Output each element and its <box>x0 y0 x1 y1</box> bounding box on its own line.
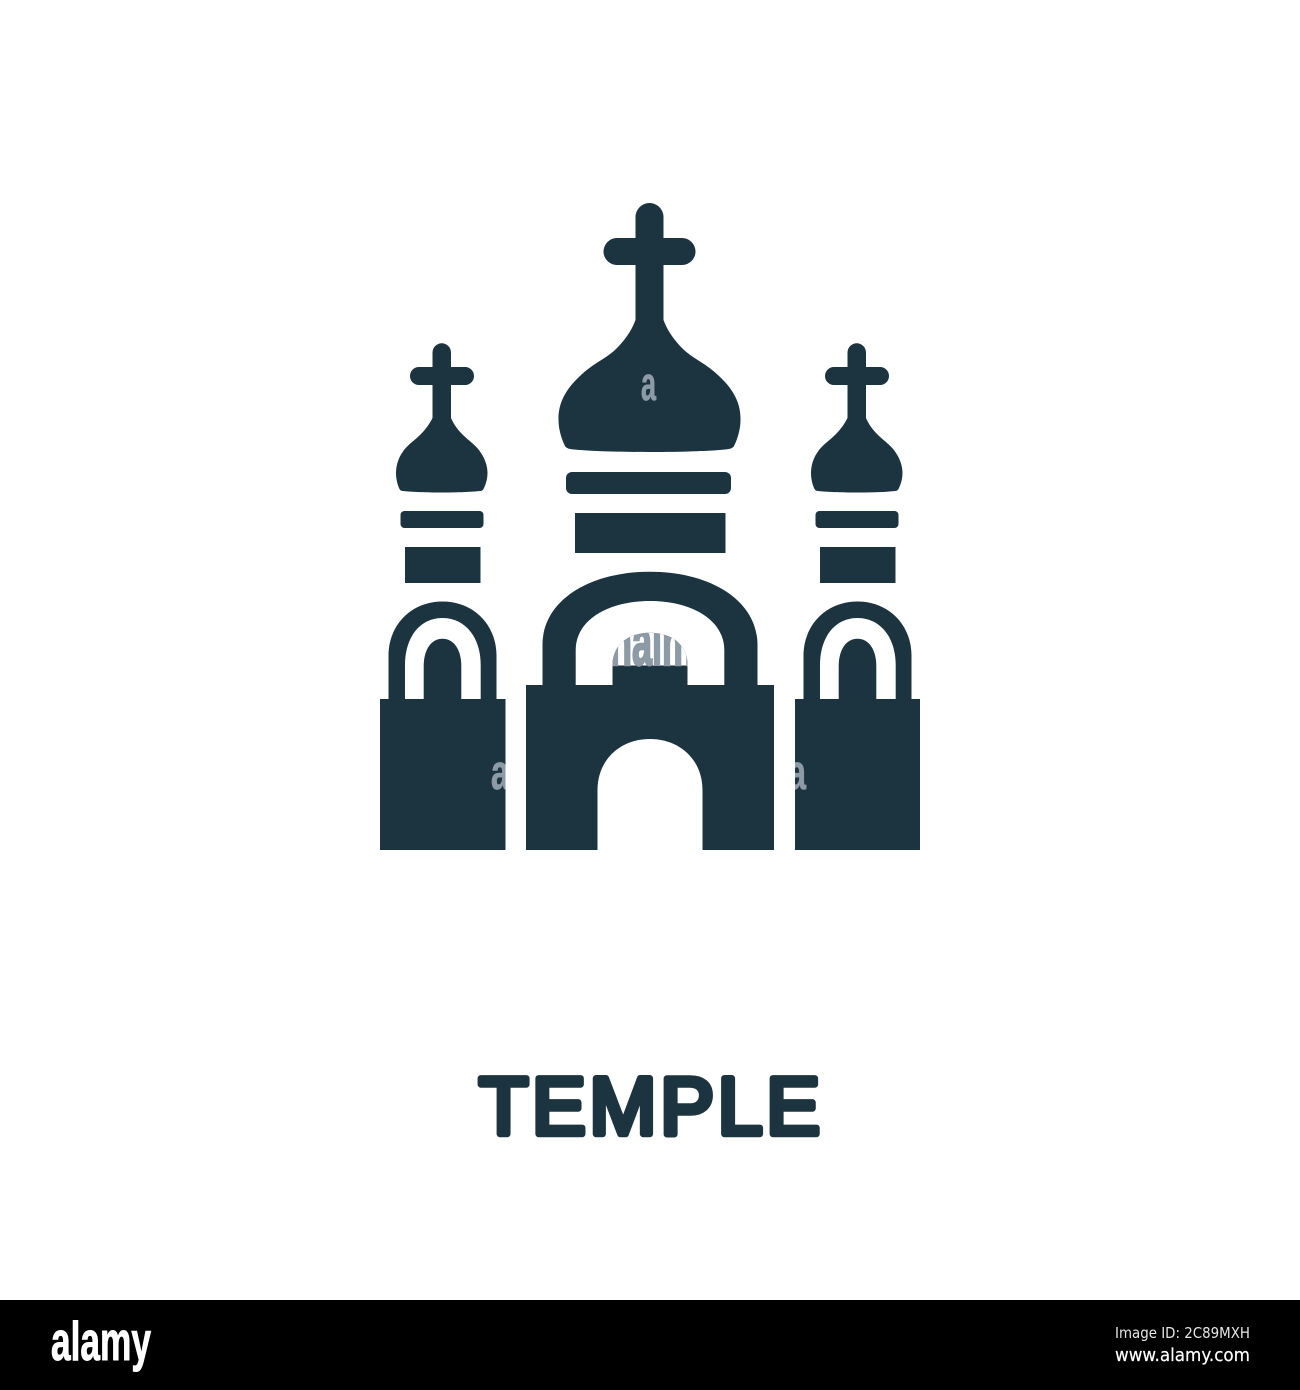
left cross <box>410 343 474 420</box>
watermark: letter on central dome: a <box>641 357 656 410</box>
left onion dome <box>396 418 488 492</box>
central arch inner pillar <box>612 633 688 690</box>
title: TEMPLE <box>479 1062 820 1152</box>
left drum <box>405 547 480 583</box>
central drum <box>575 513 726 553</box>
watermark: letters over central arch pillar <box>612 632 688 667</box>
central tower <box>526 203 774 850</box>
right base <box>795 699 920 850</box>
central cross <box>604 203 696 325</box>
watermark: letters over central arch pillar: nalm <box>610 605 694 679</box>
right cross <box>825 343 889 420</box>
central base with door opening <box>526 685 774 850</box>
right arch <box>804 602 912 705</box>
right band <box>816 511 898 528</box>
watermark: letter on left base: a <box>491 746 509 800</box>
right drum <box>820 547 896 583</box>
central arch <box>542 572 758 690</box>
right tower <box>795 343 920 850</box>
right arch inner pillar <box>839 639 876 705</box>
central band <box>566 472 731 494</box>
left tower <box>380 343 506 850</box>
central onion dome <box>558 320 741 452</box>
footer bar <box>0 1300 1300 1390</box>
website: www.alamy.com <box>1115 1345 1250 1366</box>
left band <box>400 511 484 528</box>
right onion dome <box>811 418 902 492</box>
image id: Image ID: 2C89MXH <box>1115 1324 1250 1342</box>
watermark: letter on right base: a <box>788 746 806 800</box>
logo: alamy: alamy <box>51 1310 151 1372</box>
left arch inner pillar <box>424 639 461 705</box>
left base <box>380 699 506 850</box>
left arch <box>388 602 496 705</box>
icon: temple with three domes <box>380 203 920 850</box>
